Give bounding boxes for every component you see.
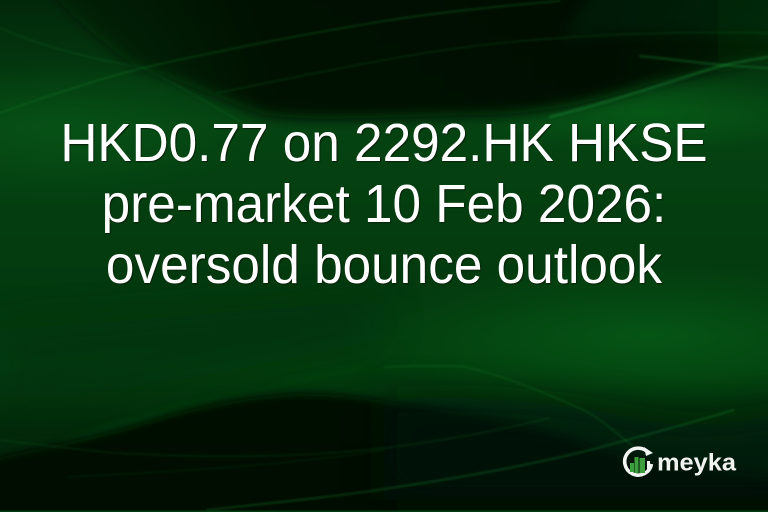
bottom dark wave: [0, 394, 768, 512]
logo: meyka: [622, 446, 737, 477]
wordmark: meyka: [657, 450, 737, 476]
title: [60, 113, 708, 295]
icon: ring with bars: [625, 447, 653, 475]
top dark wave: [40, 0, 768, 118]
title: oversold bounce outlook: [106, 235, 662, 295]
title: HKD0.77 on 2292.HK HKSE: [60, 113, 708, 173]
green ribbon above bottom wave: [50, 364, 384, 444]
title: pre-market 10 Feb 2026:: [102, 174, 666, 234]
